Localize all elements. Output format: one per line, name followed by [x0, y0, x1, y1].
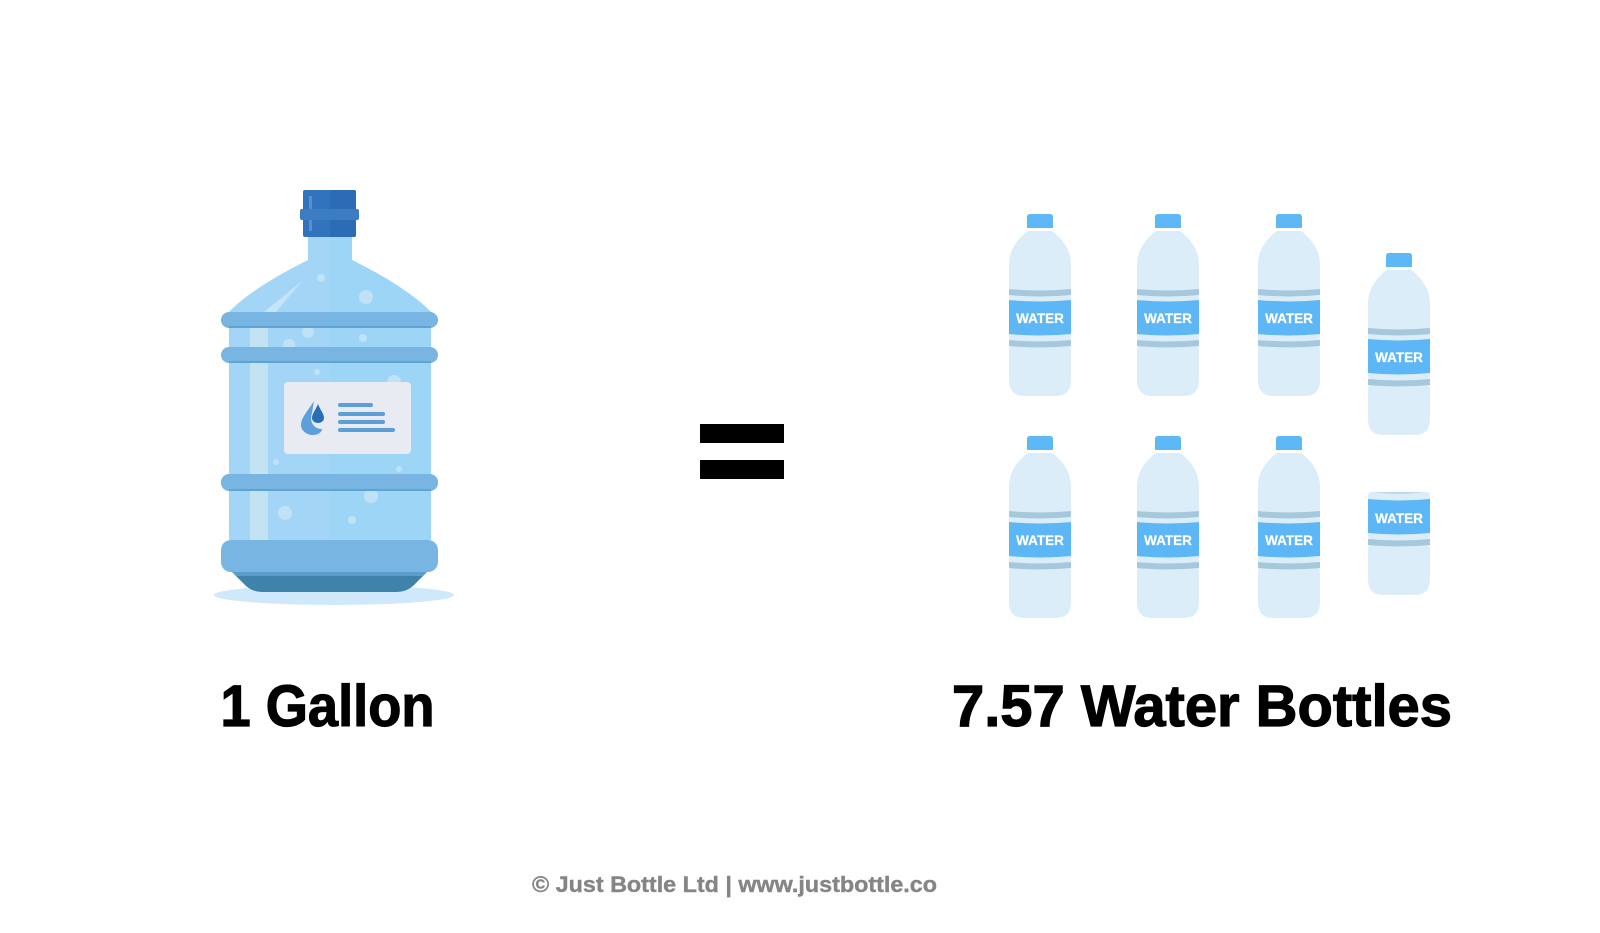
bottle 5	[1009, 436, 1071, 618]
bottle 1: WATER	[1016, 311, 1064, 326]
bottle 4: WATER	[1375, 350, 1423, 365]
bottle 4	[1368, 253, 1430, 435]
jug neck and shoulder	[229, 237, 431, 540]
footer credit: © Just Bottle Ltd | www.justbottle.co	[532, 872, 937, 897]
bottle 6: WATER	[1144, 533, 1192, 548]
heading: 7.57 Water Bottles: 7.57 Water Bottles	[952, 674, 1452, 739]
bottle 7	[1258, 436, 1320, 618]
bottle 5: WATER	[1016, 533, 1064, 548]
equals sign	[700, 424, 784, 479]
jug cap	[300, 190, 359, 237]
partial bottle	[1368, 492, 1430, 595]
bottle 1	[1009, 214, 1071, 396]
bottle 2: WATER	[1144, 311, 1192, 326]
bottle 3	[1258, 214, 1320, 396]
bottle 2	[1137, 214, 1199, 396]
icon: water jug	[214, 190, 454, 605]
bottle 6	[1137, 436, 1199, 618]
label lines	[338, 403, 395, 432]
icon: droplets	[301, 401, 322, 435]
bottle 7: WATER	[1265, 533, 1313, 548]
jug base	[221, 540, 438, 592]
bubbles	[273, 274, 402, 524]
bottle 3: WATER	[1265, 311, 1313, 326]
jug bands	[221, 312, 438, 491]
jug shadow	[214, 585, 454, 605]
partial bottle: WATER	[1375, 511, 1423, 526]
heading: 1 Gallon: 1 Gallon	[220, 674, 434, 739]
jug label	[284, 382, 411, 454]
